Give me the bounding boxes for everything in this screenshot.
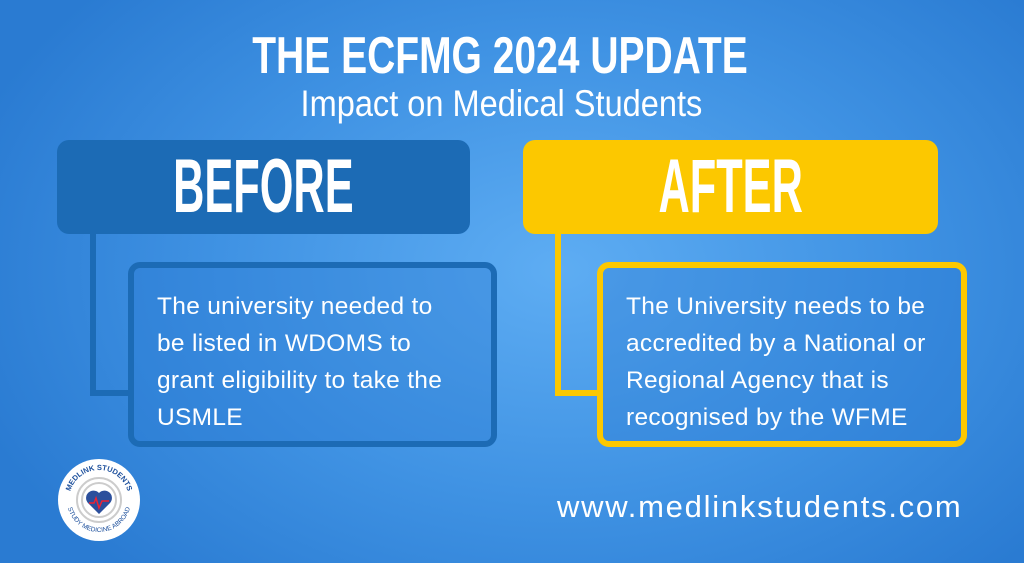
after header xyxy=(523,140,938,234)
subtitle: Impact on Medical Students xyxy=(301,83,702,124)
panel: after xyxy=(523,140,967,447)
before text box: The university needed to be listed in WDOMS to grant eligibility to take the USMLE xyxy=(157,293,442,431)
before header xyxy=(57,140,470,234)
logo xyxy=(58,459,140,541)
after text box xyxy=(597,262,967,447)
after header: AFTER xyxy=(658,144,803,229)
panel: before xyxy=(57,140,497,447)
logo: MEDLINK STUDENTS xyxy=(66,464,132,491)
logo: STUDY MEDICINE ABROAD xyxy=(68,507,130,532)
before header: BEFORE xyxy=(173,144,354,229)
before text box xyxy=(128,262,497,447)
after connector xyxy=(555,234,600,396)
before connector xyxy=(90,234,130,396)
after text box: The University needs to be accredited by a National or Regional Agency that is recognised by the WFME xyxy=(626,293,926,431)
title: THE ECFMG 2024 UPDATE xyxy=(252,27,748,85)
website url: www.medlinkstudents.com xyxy=(557,489,962,524)
